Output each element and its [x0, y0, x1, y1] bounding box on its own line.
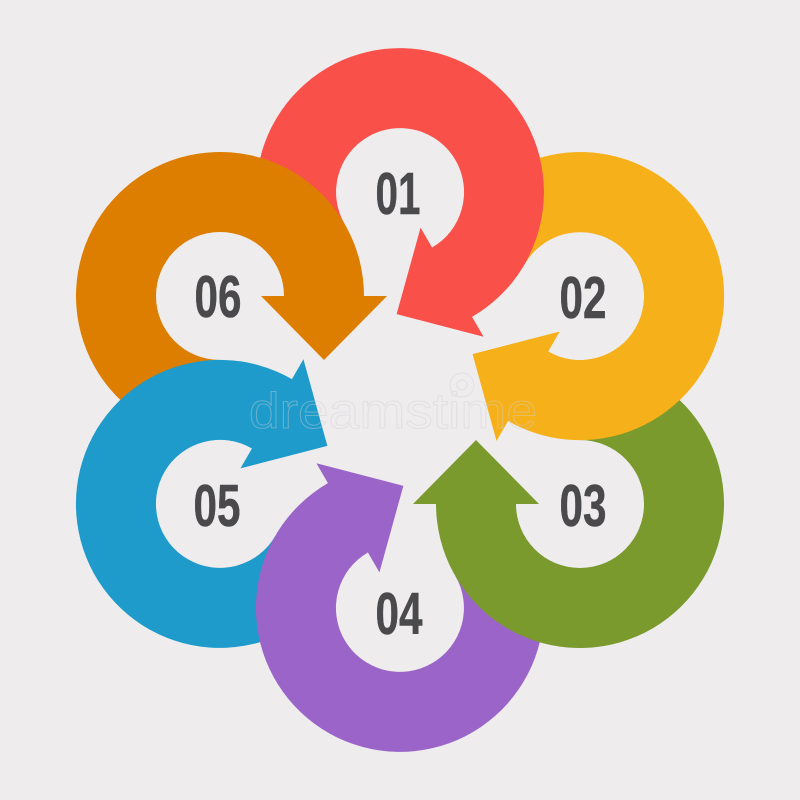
number 06: 06: [194, 264, 242, 330]
number 02: 02: [560, 265, 606, 331]
arrow 01: red: [237, 0, 608, 389]
arrow 06: orange: [76, 152, 387, 401]
arrow 04: purple: [192, 411, 563, 800]
number 01: 01: [376, 161, 420, 227]
number 03: 03: [560, 473, 606, 539]
number 05: 05: [194, 473, 240, 539]
arrow 03: green: [413, 399, 724, 648]
arrow 02: yellow: [406, 119, 777, 513]
watermark: dreamstime: [249, 383, 537, 439]
number 04: 04: [376, 581, 423, 647]
arrow 05: blue: [23, 287, 394, 681]
